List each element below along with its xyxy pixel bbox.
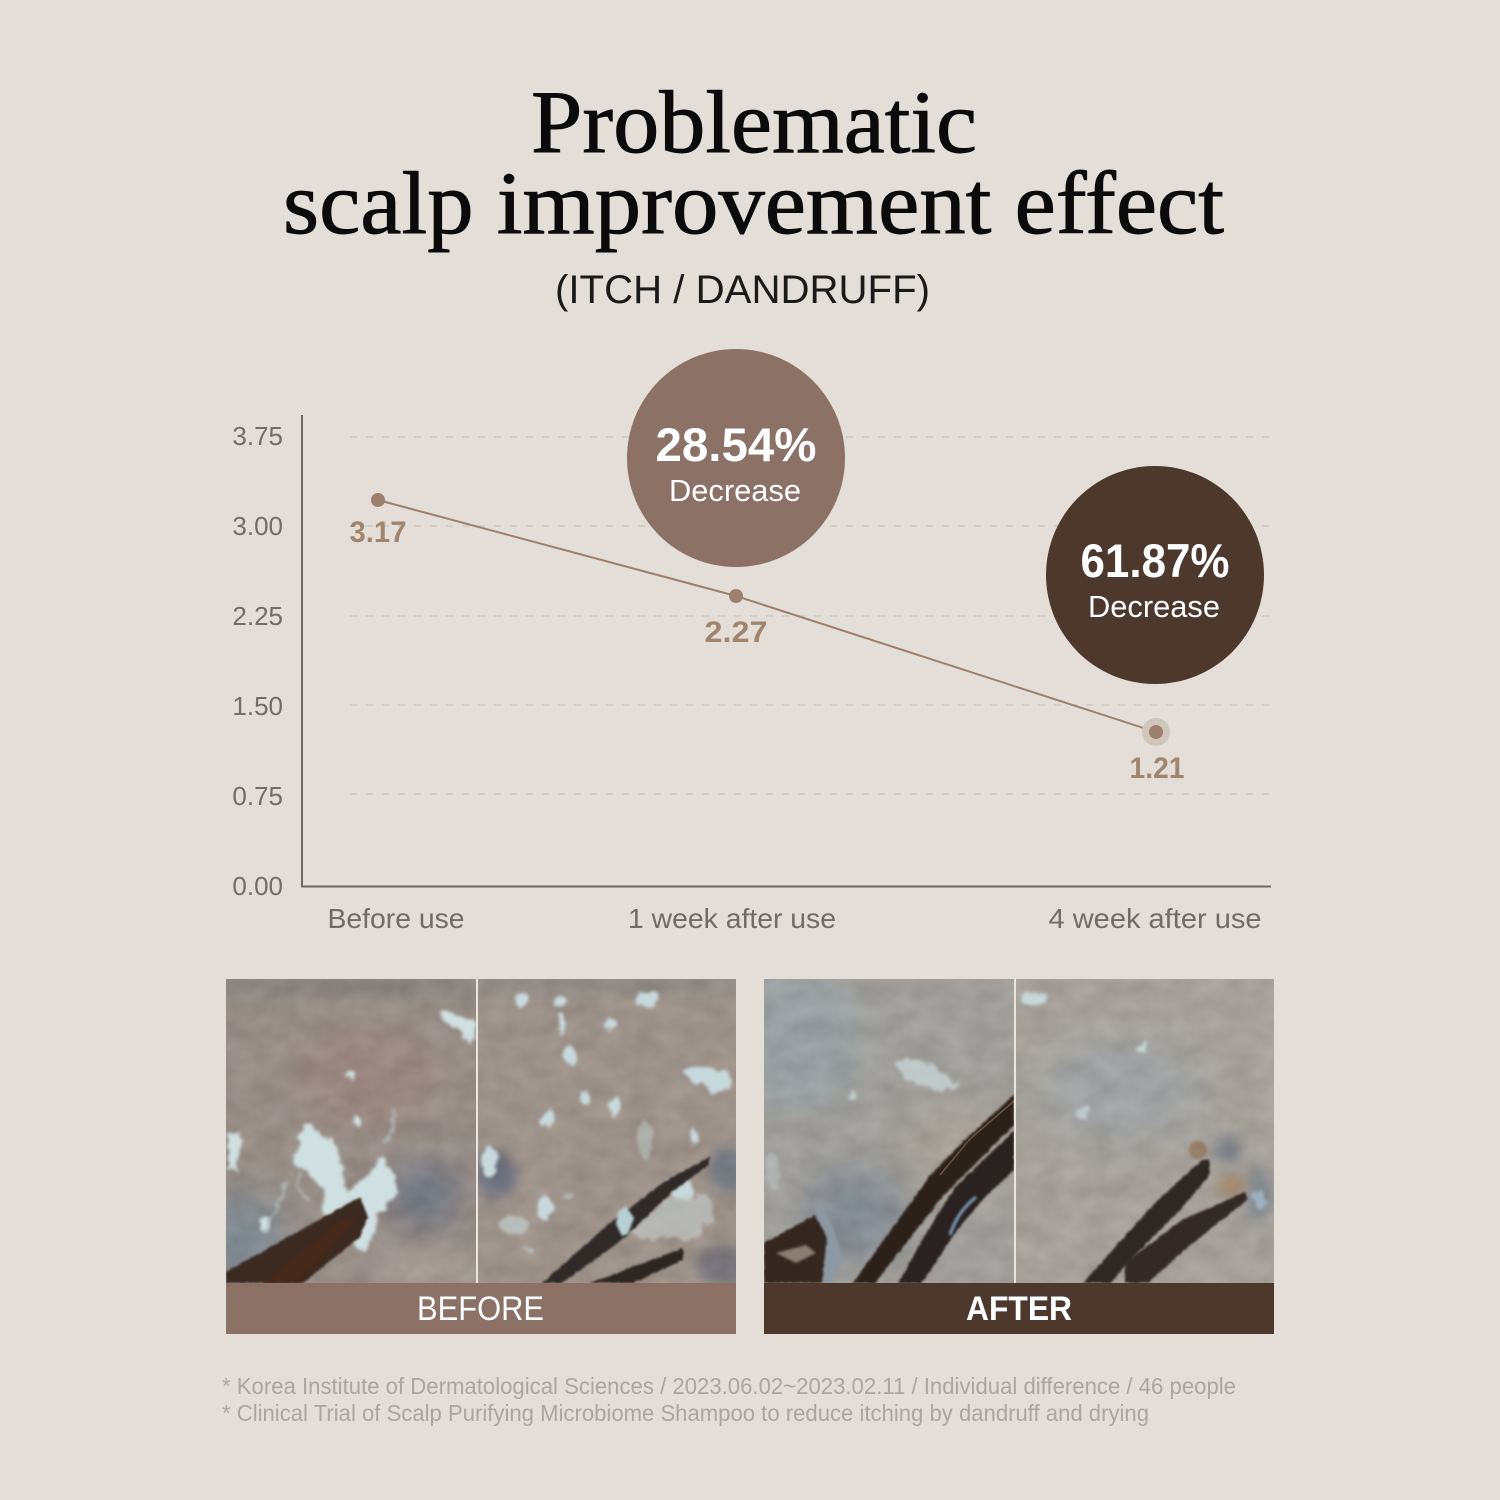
x axis labels [328,903,1262,934]
callout: 61.87% decrease [1046,466,1264,684]
callout: 61.87% decrease: 61.87% [1080,534,1230,587]
data point: 1 week: 2.27 [704,616,768,649]
data point: 1 week [704,589,768,649]
title [283,74,1224,253]
x axis labels: Before use [328,903,464,934]
label bar: after [764,1283,1274,1334]
panel: after [740,970,1274,1334]
panel: before [195,979,750,1334]
hair strand [1083,1160,1210,1283]
hair strand [853,1095,1014,1283]
callout: 28.54% decrease: 28.54% [656,418,816,471]
data point: 4 week [1130,718,1184,785]
trend line [378,500,1156,732]
photo: after left [764,979,1014,1283]
data point: 4 week: 1.21 [1130,752,1184,785]
divider [1014,979,1016,1283]
callout: 61.87% decrease: Decrease [1088,589,1220,624]
footnotes: * Clinical Trial of Scalp Purifying Microbiome Shampoo to reduce itching by dandruff and drying [222,1400,1149,1426]
y axis labels: 0.00 [232,871,283,901]
y axis labels: 3.00 [232,511,283,541]
y axis labels: 3.75 [232,421,283,451]
y axis labels: 2.25 [232,601,283,631]
label bar: before: BEFORE [417,1290,544,1328]
callout: 28.54% decrease: Decrease [669,473,801,508]
data point: before use: 3.17 [350,516,406,549]
callout: 28.54% decrease [627,349,845,567]
footnotes [222,1373,1236,1426]
photo: after right [1016,979,1274,1283]
photo: before right [473,979,750,1285]
footnotes: * Korea Institute of Dermatological Sciences / 2023.06.02~2023.02.11 / Individual difference / 46 people [222,1373,1236,1399]
photo: before left [226,979,476,1283]
x axis labels: 1 week after use [628,903,836,934]
y axis labels [232,421,283,901]
y axis labels: 0.75 [232,781,283,811]
title: Problematic [531,74,977,172]
x axis labels: 4 week after use [1048,903,1262,934]
line chart [232,349,1272,934]
y axis labels: 1.50 [232,691,283,721]
data point: before use [350,493,406,549]
divider [476,979,478,1283]
label bar: before [226,1283,736,1334]
subtitle: (ITCH / DANDRUFF) [555,268,930,312]
title: scalp improvement effect [283,155,1224,253]
label bar: after: AFTER [966,1290,1072,1328]
axes [302,415,1271,886]
